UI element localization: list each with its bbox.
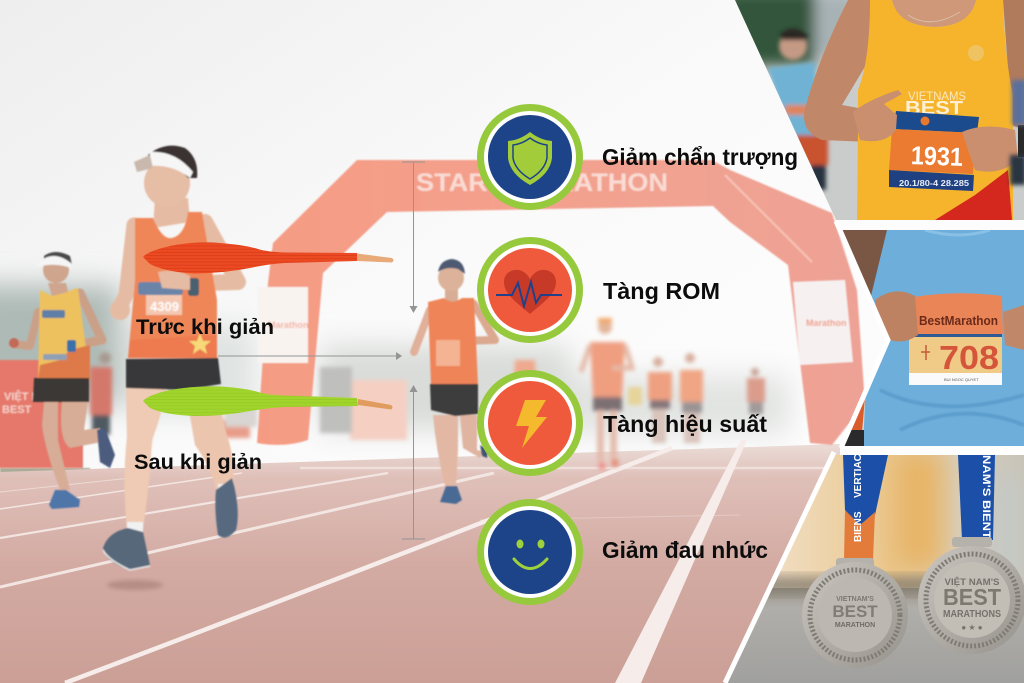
- arrow: horizontal: [218, 352, 402, 360]
- arrow: top vertical: [402, 162, 425, 313]
- inflatable start arch: Marathon: [806, 318, 846, 328]
- benefit: increase ROM: Tàng ROM: [603, 278, 720, 304]
- label: after stretching: Sau khi giản: [134, 451, 262, 474]
- medal right: VIỆT NAM'S: [944, 576, 1000, 587]
- photo panel: runner with bib 708: 708: [939, 339, 999, 376]
- arrow: bottom vertical: [402, 385, 425, 539]
- base decorations behind runners: [222, 365, 409, 442]
- panel separator: white edge strokes: [725, 221, 888, 683]
- medal right: MARATHONS: [943, 609, 1001, 620]
- yellow singlet: [857, 0, 1013, 220]
- photo panel: runner with bib 1931: [725, 0, 1024, 220]
- photo panel: finisher medals: [725, 450, 1024, 683]
- red banner left: BEST: [2, 404, 32, 416]
- inflatable start arch: [257, 160, 865, 445]
- medal left: [802, 558, 908, 668]
- red banner left: VIỆT NAM: [4, 390, 57, 403]
- medal right: [918, 537, 1024, 654]
- blue singlet: [863, 230, 1024, 446]
- running track: [0, 440, 840, 683]
- medal right: BEST: [943, 584, 1001, 610]
- flag: [935, 170, 1012, 220]
- bib: [910, 293, 1003, 334]
- photo panel: runner with bib 1931: 1931: [910, 140, 963, 172]
- icon: shield: [480, 108, 580, 206]
- red banner left: [0, 360, 83, 468]
- muscle after stretching (green): [143, 386, 392, 416]
- background crowd: [90, 318, 765, 470]
- photo panel: runner with bib 1931: BEST: [905, 98, 963, 118]
- photo panel: runner with bib 708: BestMarathon: [919, 313, 998, 328]
- hands: [853, 90, 902, 141]
- medal left: VIETNAM'S: [836, 596, 874, 603]
- runner: centre: [414, 259, 495, 504]
- photo panel: runner with bib 708: BUI NGOC QUYET: [944, 377, 979, 382]
- arms and torso: [804, 0, 870, 142]
- photo panel: runner with bib 1931: VIETNAMS: [908, 89, 966, 103]
- hazy tree line: [0, 285, 790, 435]
- benefit: reduce tension: Giảm chẩn trượng: [602, 144, 798, 170]
- photo panel: finisher medals: VERTIAC: [853, 454, 864, 498]
- hands: [875, 291, 918, 342]
- icon: smiley: [480, 502, 580, 602]
- blurred runner behind: [768, 28, 828, 190]
- inflatable start arch: Marathon: [268, 320, 308, 330]
- medal left: MARATHON: [835, 622, 875, 629]
- medal left: BEST: [832, 602, 878, 621]
- ribbons: [843, 455, 888, 528]
- runner: large foreground: 4309: [150, 299, 179, 314]
- icon: heart with pulse: [480, 240, 580, 340]
- photo panel: finisher medals: NAM'S BIENT: [980, 455, 992, 539]
- orange shorts edge: [852, 399, 865, 430]
- muscle before stretching (red): [143, 242, 394, 274]
- photo panel: finisher medals: BIENS: [853, 511, 864, 542]
- icon: lightning bolt: [480, 374, 580, 472]
- inflatable start arch: START-MARATHON: [416, 169, 668, 197]
- benefit: reduce soreness: Giảm đau nhức: [602, 537, 768, 563]
- photo panel: runner with bib 708: [835, 228, 1024, 450]
- photo panel: runner with bib 1931: 20.1/80-4 28.285: [899, 179, 970, 188]
- benefit: increase performance: Tàng hiệu suất: [603, 411, 767, 437]
- runner: second left: [9, 252, 115, 509]
- runner: large foreground: [103, 146, 238, 570]
- medal right: ● ★ ●: [961, 623, 983, 632]
- bib: [893, 111, 979, 133]
- label: before stretching: Trức khi giản: [136, 316, 274, 339]
